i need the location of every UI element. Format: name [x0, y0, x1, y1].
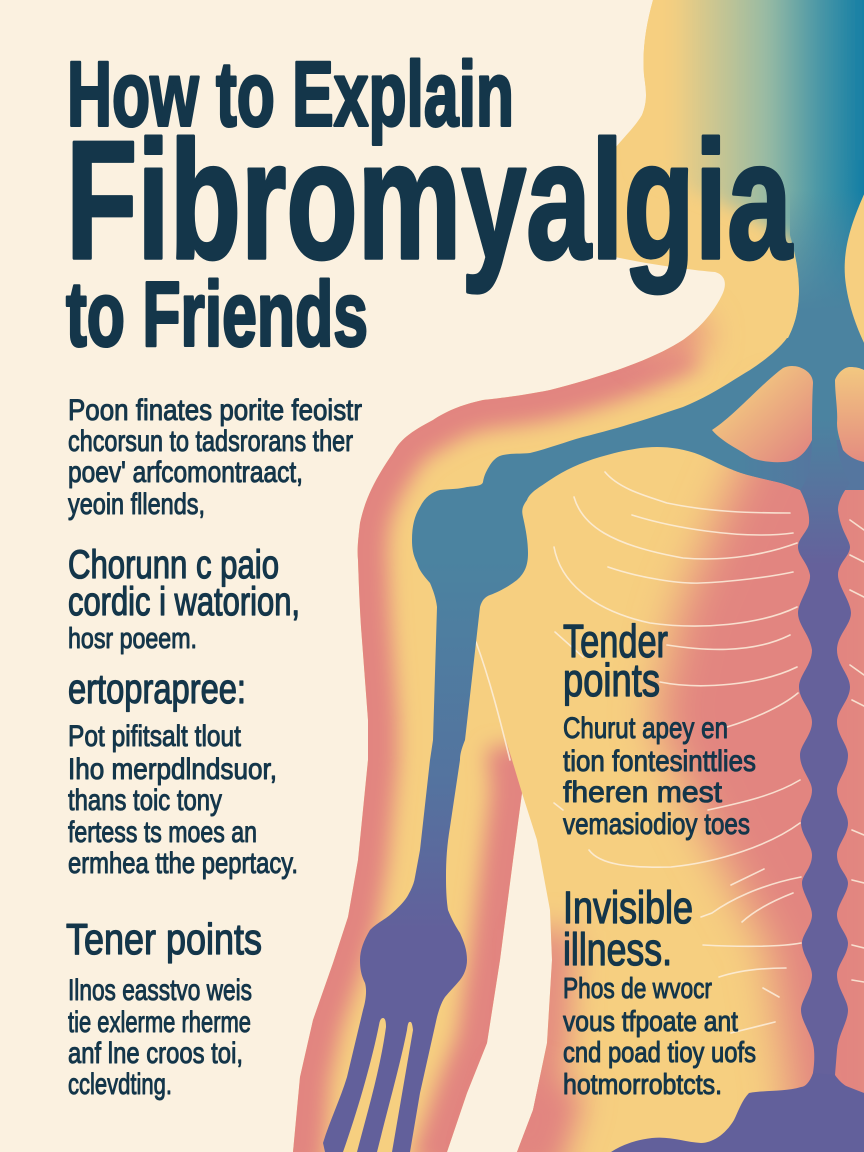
- illustration: human body silhouette: [280, 0, 864, 1152]
- text block: symptoms: Pot pifitsalt tlout: [68, 720, 242, 753]
- text block: invisible illness: illness.: [563, 924, 672, 975]
- text block: symptoms: fertess ts moes an: [68, 816, 257, 849]
- text block: tender points: Tender: [563, 615, 668, 667]
- text block: invisible illness: cnd poad tioy uofs: [563, 1037, 756, 1069]
- text block: symptoms: Iho merpdlndsuor,: [68, 753, 277, 786]
- text block: tener points: tie exlerme rherme: [68, 1006, 251, 1039]
- text block: chronic pain: cordic i watorion,: [68, 580, 300, 624]
- text block: symptoms: thans toic tony: [68, 784, 222, 817]
- text block: chronic pain: Chorunn c paio: [68, 543, 279, 587]
- text block: intro: Poon finates porite feoistr: [68, 394, 362, 427]
- text block: invisible illness: [563, 882, 756, 1101]
- text block: tender points: points: [563, 654, 660, 706]
- text block: tener points: Ilnos easstvo weis: [68, 974, 252, 1007]
- text block: invisible illness: vous tfpoate ant: [563, 1006, 738, 1038]
- title: [66, 44, 793, 366]
- text block: invisible illness: Invisible: [563, 882, 693, 933]
- text block: intro: poev' arfcomontraact,: [68, 456, 303, 489]
- text block: intro: yeoin fllends,: [68, 488, 205, 521]
- text block: chronic pain: hosr poeem.: [68, 623, 197, 655]
- text block: tender points: tion fontesinttlies: [563, 745, 756, 778]
- chest opening left: [712, 366, 813, 462]
- text block: symptoms: ermhea tthe peprtacy.: [68, 847, 298, 880]
- body silhouette fill: [280, 0, 864, 1152]
- text block: symptoms: [68, 665, 298, 880]
- text block: intro: chcorsun to tadsrorans ther: [68, 425, 353, 458]
- text block: symptoms: ertopraprее:: [68, 665, 246, 712]
- text block: invisible illness: Phos de wvocr: [563, 973, 712, 1005]
- spine: [798, 380, 864, 1152]
- right neck shape: [845, 190, 864, 347]
- pelvis shape: [611, 1073, 864, 1152]
- text block: tender points: Churut apey en: [563, 712, 728, 745]
- text block: chronic pain: [68, 543, 300, 655]
- rib lines: [476, 472, 864, 1033]
- text block: tener points: cclevdting.: [68, 1068, 172, 1101]
- text block: intro: [68, 394, 362, 521]
- text block: tender points: [563, 615, 756, 841]
- text block: tener points: [66, 915, 262, 1101]
- text block: tender points: vemasiodioy toes: [563, 808, 750, 841]
- text block: tender points: fheren mest: [563, 776, 723, 809]
- shoulder, clavicle and arm bone: [323, 338, 864, 1152]
- text block: invisible illness: hotmorrobtcts.: [563, 1069, 722, 1101]
- chest band blending into spine: [733, 440, 864, 490]
- chest opening right: [835, 367, 864, 462]
- title line 3: to Friends: [66, 264, 368, 366]
- text block: tener points: anf lne croos toi,: [68, 1037, 243, 1070]
- title line 1: How to Explain: [67, 44, 514, 146]
- text block: tener points: Tener points: [66, 915, 262, 964]
